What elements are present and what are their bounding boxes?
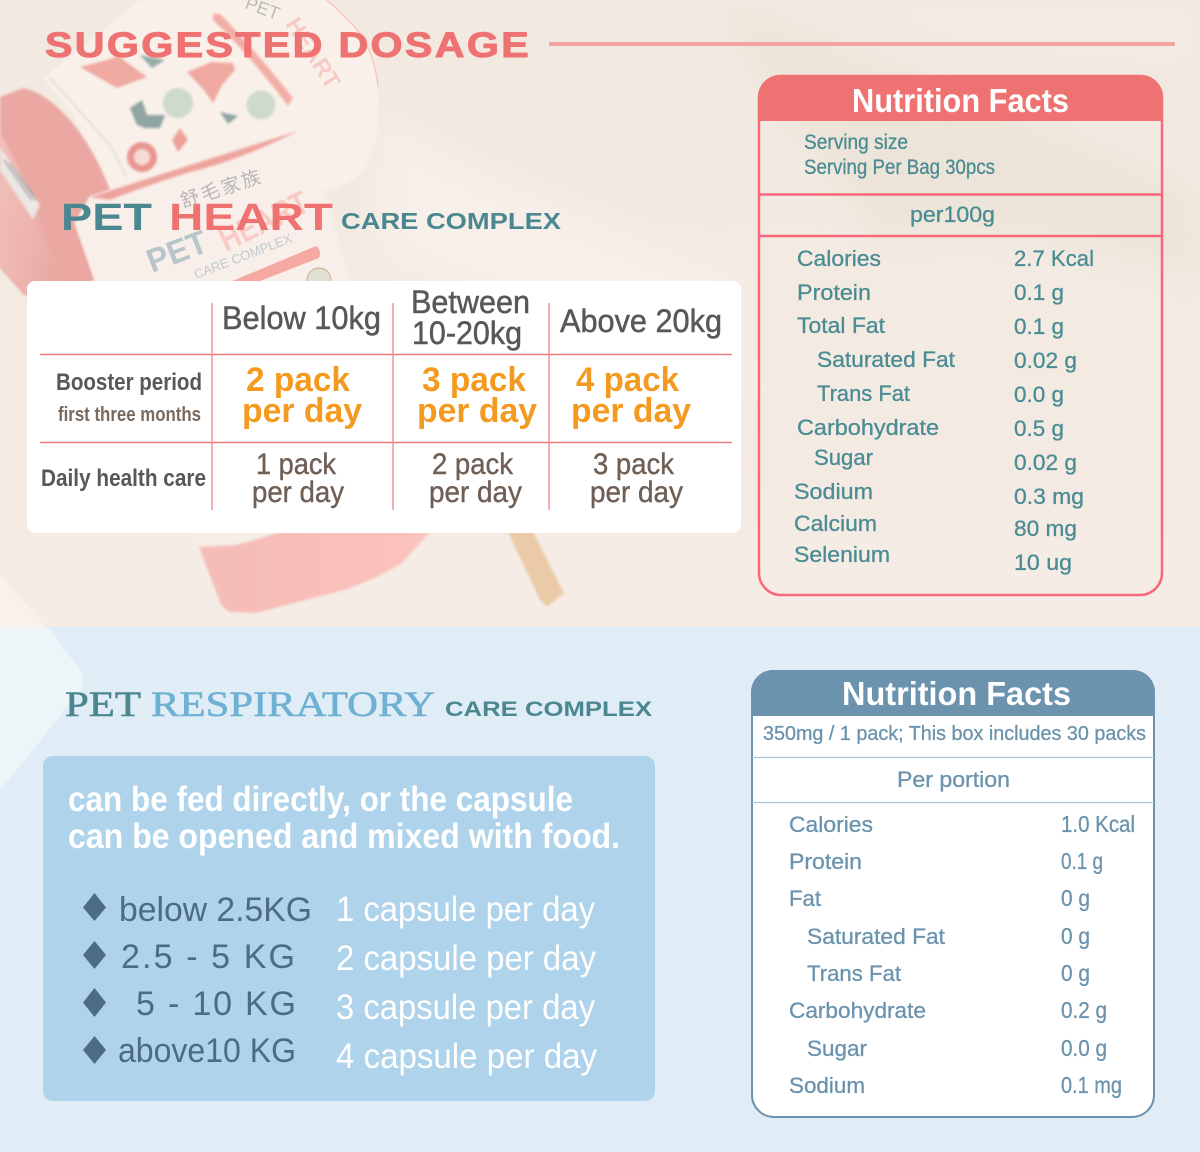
booster values: 3 pack [422, 361, 526, 399]
row label: booster: first three months [58, 404, 201, 426]
daily values [252, 448, 683, 509]
heading: pet heart: PET [61, 197, 152, 239]
booster values: 2 pack [246, 361, 350, 399]
serving info [804, 131, 995, 179]
nutrient labels: Protein [789, 849, 862, 874]
nutrient values: 0 g [1061, 923, 1090, 949]
instructions: can be fed directly, or the capsule [68, 780, 573, 819]
row label: daily: Daily health care [41, 465, 206, 492]
lid side wall [0, 136, 38, 296]
rear jar rim stroke [327, 0, 378, 87]
capsule counts: 4 capsule per day [336, 1037, 597, 1076]
heading: pet respiratory [65, 684, 652, 724]
nutrient labels: Saturated Fat [817, 347, 955, 372]
booster values [242, 361, 691, 430]
nutrient values: 0.02 g [1014, 348, 1077, 373]
nutrient labels: Saturated Fat [807, 924, 945, 949]
panel: nutrition facts heart [758, 75, 1163, 595]
capsule counts: 3 capsule per day [336, 988, 595, 1027]
lower jar cream [189, 530, 290, 548]
nutrient labels: Sodium [789, 1073, 865, 1098]
nutrient values: 0.5 g [1014, 416, 1064, 441]
nutrient labels: Calcium [794, 511, 877, 536]
weight ranges: above10 KG [118, 1032, 296, 1070]
nutrient values: 0.1 g [1014, 280, 1064, 305]
capsule counts [336, 890, 597, 1076]
nutrient values: 1.0 Kcal [1061, 811, 1135, 837]
nutrient labels: Calories [789, 812, 873, 837]
nutrient values: 0.0 g [1061, 1035, 1107, 1061]
serving info: Serving Per Bag 30pcs [804, 156, 995, 179]
rear jar illustrations [50, 14, 293, 178]
barcode [0, 147, 40, 220]
rear jar lettering: HEART [281, 13, 346, 93]
front jar rim [90, 131, 298, 200]
daily values: 3 pack [593, 448, 675, 481]
heading: pet heart: CARE COMPLEX [341, 208, 562, 234]
row label: booster [56, 369, 202, 426]
bullets [83, 893, 106, 1064]
capsule counts: 1 capsule per day [336, 890, 595, 929]
booster values: per day [571, 392, 691, 430]
front jar label [146, 170, 332, 281]
daily values: 1 pack [256, 448, 337, 481]
nutrient values: 2.7 Kcal [1014, 246, 1094, 271]
capsule counts: 2 capsule per day [336, 939, 596, 978]
nutrient values: 0.2 g [1061, 997, 1107, 1023]
front jar label: 舒毛家族 [178, 166, 263, 213]
panel: nutrition facts heart: Nutrition Facts [852, 82, 1069, 119]
background: product photo [0, 0, 1200, 627]
column headers: Below 10kg [222, 300, 381, 336]
nutrient values: 80 mg [1014, 516, 1077, 541]
nutrient values: 0.02 g [1014, 450, 1077, 475]
nutrient values: 0.1 mg [1061, 1072, 1122, 1098]
instructions [68, 780, 620, 856]
nutrient labels: Sodium [794, 479, 873, 504]
rear jar lettering [246, 0, 342, 86]
nutrient labels: Carbohydrate [789, 998, 926, 1023]
nutrient values: 0 g [1061, 885, 1090, 911]
heading: pet respiratory: RESPIRATORY [151, 684, 435, 724]
daily values: per day [590, 476, 683, 509]
front jar body [74, 191, 346, 280]
nutrient labels: Selenium [794, 542, 890, 567]
nutrient values: 10 ug [1014, 550, 1072, 575]
wooden stick [507, 530, 564, 607]
nutrient labels: Protein [797, 280, 871, 305]
nutrient labels: Trans Fat [817, 381, 910, 406]
per portion: Per portion [897, 767, 1010, 792]
title: SUGGESTED DOSAGE [45, 26, 531, 65]
booster values: 4 pack [576, 361, 679, 399]
title rule [549, 42, 1175, 46]
booster values: per day [242, 392, 362, 430]
heading: pet heart [61, 197, 562, 239]
nutrient labels: Sugar [807, 1036, 867, 1061]
rear jar body [43, 0, 379, 190]
daily values: 2 pack [432, 448, 514, 481]
nutrient values: 0.1 g [1014, 314, 1064, 339]
nutrient values [1014, 246, 1094, 575]
weight ranges: below 2.5KG [119, 891, 312, 929]
row label: booster: Booster period [56, 369, 202, 396]
daily values: per day [252, 476, 344, 509]
column headers: 10-20kg [412, 315, 522, 351]
nutrient labels [789, 812, 945, 1098]
heading: pet respiratory: CARE COMPLEX [445, 698, 652, 721]
nutrient values: 0.0 g [1014, 382, 1064, 407]
nutrient labels: Total Fat [797, 313, 885, 338]
serving info: Serving size [804, 131, 908, 154]
panel: capsule dosage [43, 756, 655, 1101]
panel: dosage table [27, 281, 741, 533]
nutrient values: 0.1 g [1061, 848, 1103, 874]
serving info: 350mg / 1 pack; This box includes 30 packs [763, 723, 1146, 745]
nutrient labels: Fat [789, 886, 821, 911]
panel: nutrition facts respiratory: Nutrition Facts [842, 675, 1071, 712]
daily values: per day [429, 476, 522, 509]
nutrient labels: Sugar [814, 445, 873, 470]
nutrient labels: Trans Fat [807, 961, 901, 986]
rear jar lid [0, 88, 110, 300]
per 100g: per100g [910, 202, 995, 227]
weight ranges: 2.5 - 5 KG [121, 938, 295, 976]
instructions: can be opened and mixed with food. [68, 817, 620, 856]
front jar label: CARE COMPLEX [192, 230, 294, 282]
nutrient labels: Carbohydrate [797, 415, 939, 440]
panel: nutrition facts respiratory [751, 670, 1155, 1117]
lower section background [0, 627, 1200, 1152]
weight ranges [118, 891, 312, 1070]
lower jar pink base [199, 530, 432, 613]
nutrient values [1061, 811, 1135, 1098]
heading: pet heart: HEART [169, 197, 333, 239]
nutrient labels [794, 246, 955, 567]
front jar label: HEART [213, 183, 314, 258]
chevron decoration [0, 627, 84, 790]
front jar label: PET [141, 223, 212, 280]
heading: pet respiratory: PET [65, 684, 141, 724]
column headers [222, 284, 722, 351]
nutrient labels: Calories [797, 246, 881, 271]
weight ranges: 5 - 10 KG [136, 985, 296, 1023]
nutrient values: 0 g [1061, 960, 1090, 986]
nutrient values: 0.3 mg [1014, 484, 1084, 509]
column headers: Above 20kg [560, 303, 722, 339]
column headers: Between [411, 284, 530, 320]
booster values: per day [417, 392, 537, 430]
